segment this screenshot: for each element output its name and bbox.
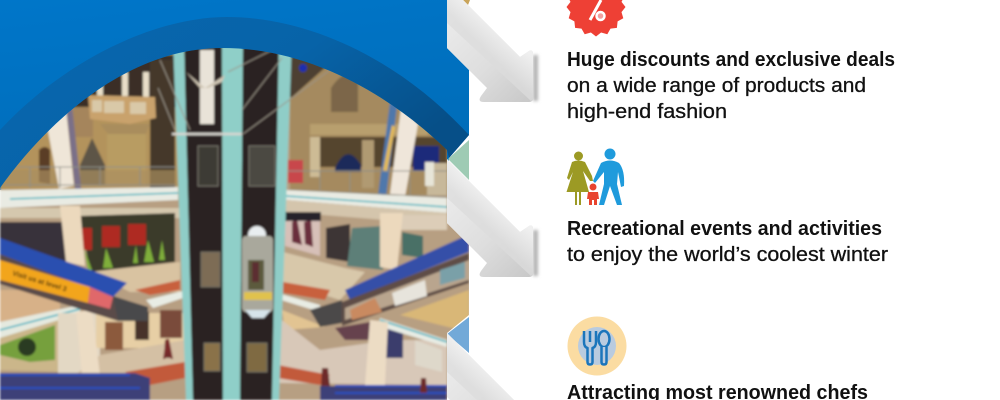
man <box>593 148 624 205</box>
icon: red discount badge <box>566 0 626 36</box>
shoppers <box>163 339 173 359</box>
decorative floor patterns <box>125 280 330 385</box>
bottom escalators <box>0 340 447 400</box>
child <box>587 184 599 205</box>
pillars and banners <box>47 102 418 199</box>
mall interior photo <box>0 40 470 400</box>
floor bands <box>0 187 447 225</box>
right shop fronts <box>283 212 447 300</box>
railings <box>5 167 447 197</box>
blue header panel <box>0 0 469 190</box>
gold sliver <box>463 0 470 5</box>
column pillars lower <box>60 206 403 385</box>
glass elevator capsule <box>242 226 273 318</box>
woman <box>566 152 593 205</box>
mid floor slabs <box>0 290 469 385</box>
blue triangle <box>447 317 469 353</box>
heading and text: discounts: Huge discounts and exclusive deals <box>567 49 895 71</box>
heading and text: discounts: high-end fashion <box>567 101 727 123</box>
heading and text: recreation: to enjoy the world’s coolest winter <box>567 244 888 266</box>
heading and text: recreation: Recreational events and activities <box>567 218 882 240</box>
upper right stonework <box>287 58 447 196</box>
teal triangle <box>448 140 469 180</box>
right escalator with poster <box>310 237 469 327</box>
dark blue arc band <box>0 17 469 188</box>
upper left stonework <box>0 54 178 190</box>
icon: family <box>566 148 624 205</box>
arrow 2 <box>447 159 538 277</box>
heading and text: recreation <box>567 218 888 266</box>
left escalator with orange banner: Visit us at level 3 <box>11 270 67 293</box>
left escalator with orange banner <box>0 238 148 321</box>
heading and text: discounts <box>567 49 895 123</box>
left shop front <box>0 213 180 292</box>
icon: fork and spoon <box>568 316 626 376</box>
elevator shaft <box>158 40 330 400</box>
heading and text: discounts: on a wide range of products and <box>567 75 866 97</box>
arrow 1 <box>447 0 538 102</box>
arrow 3 <box>447 333 514 400</box>
